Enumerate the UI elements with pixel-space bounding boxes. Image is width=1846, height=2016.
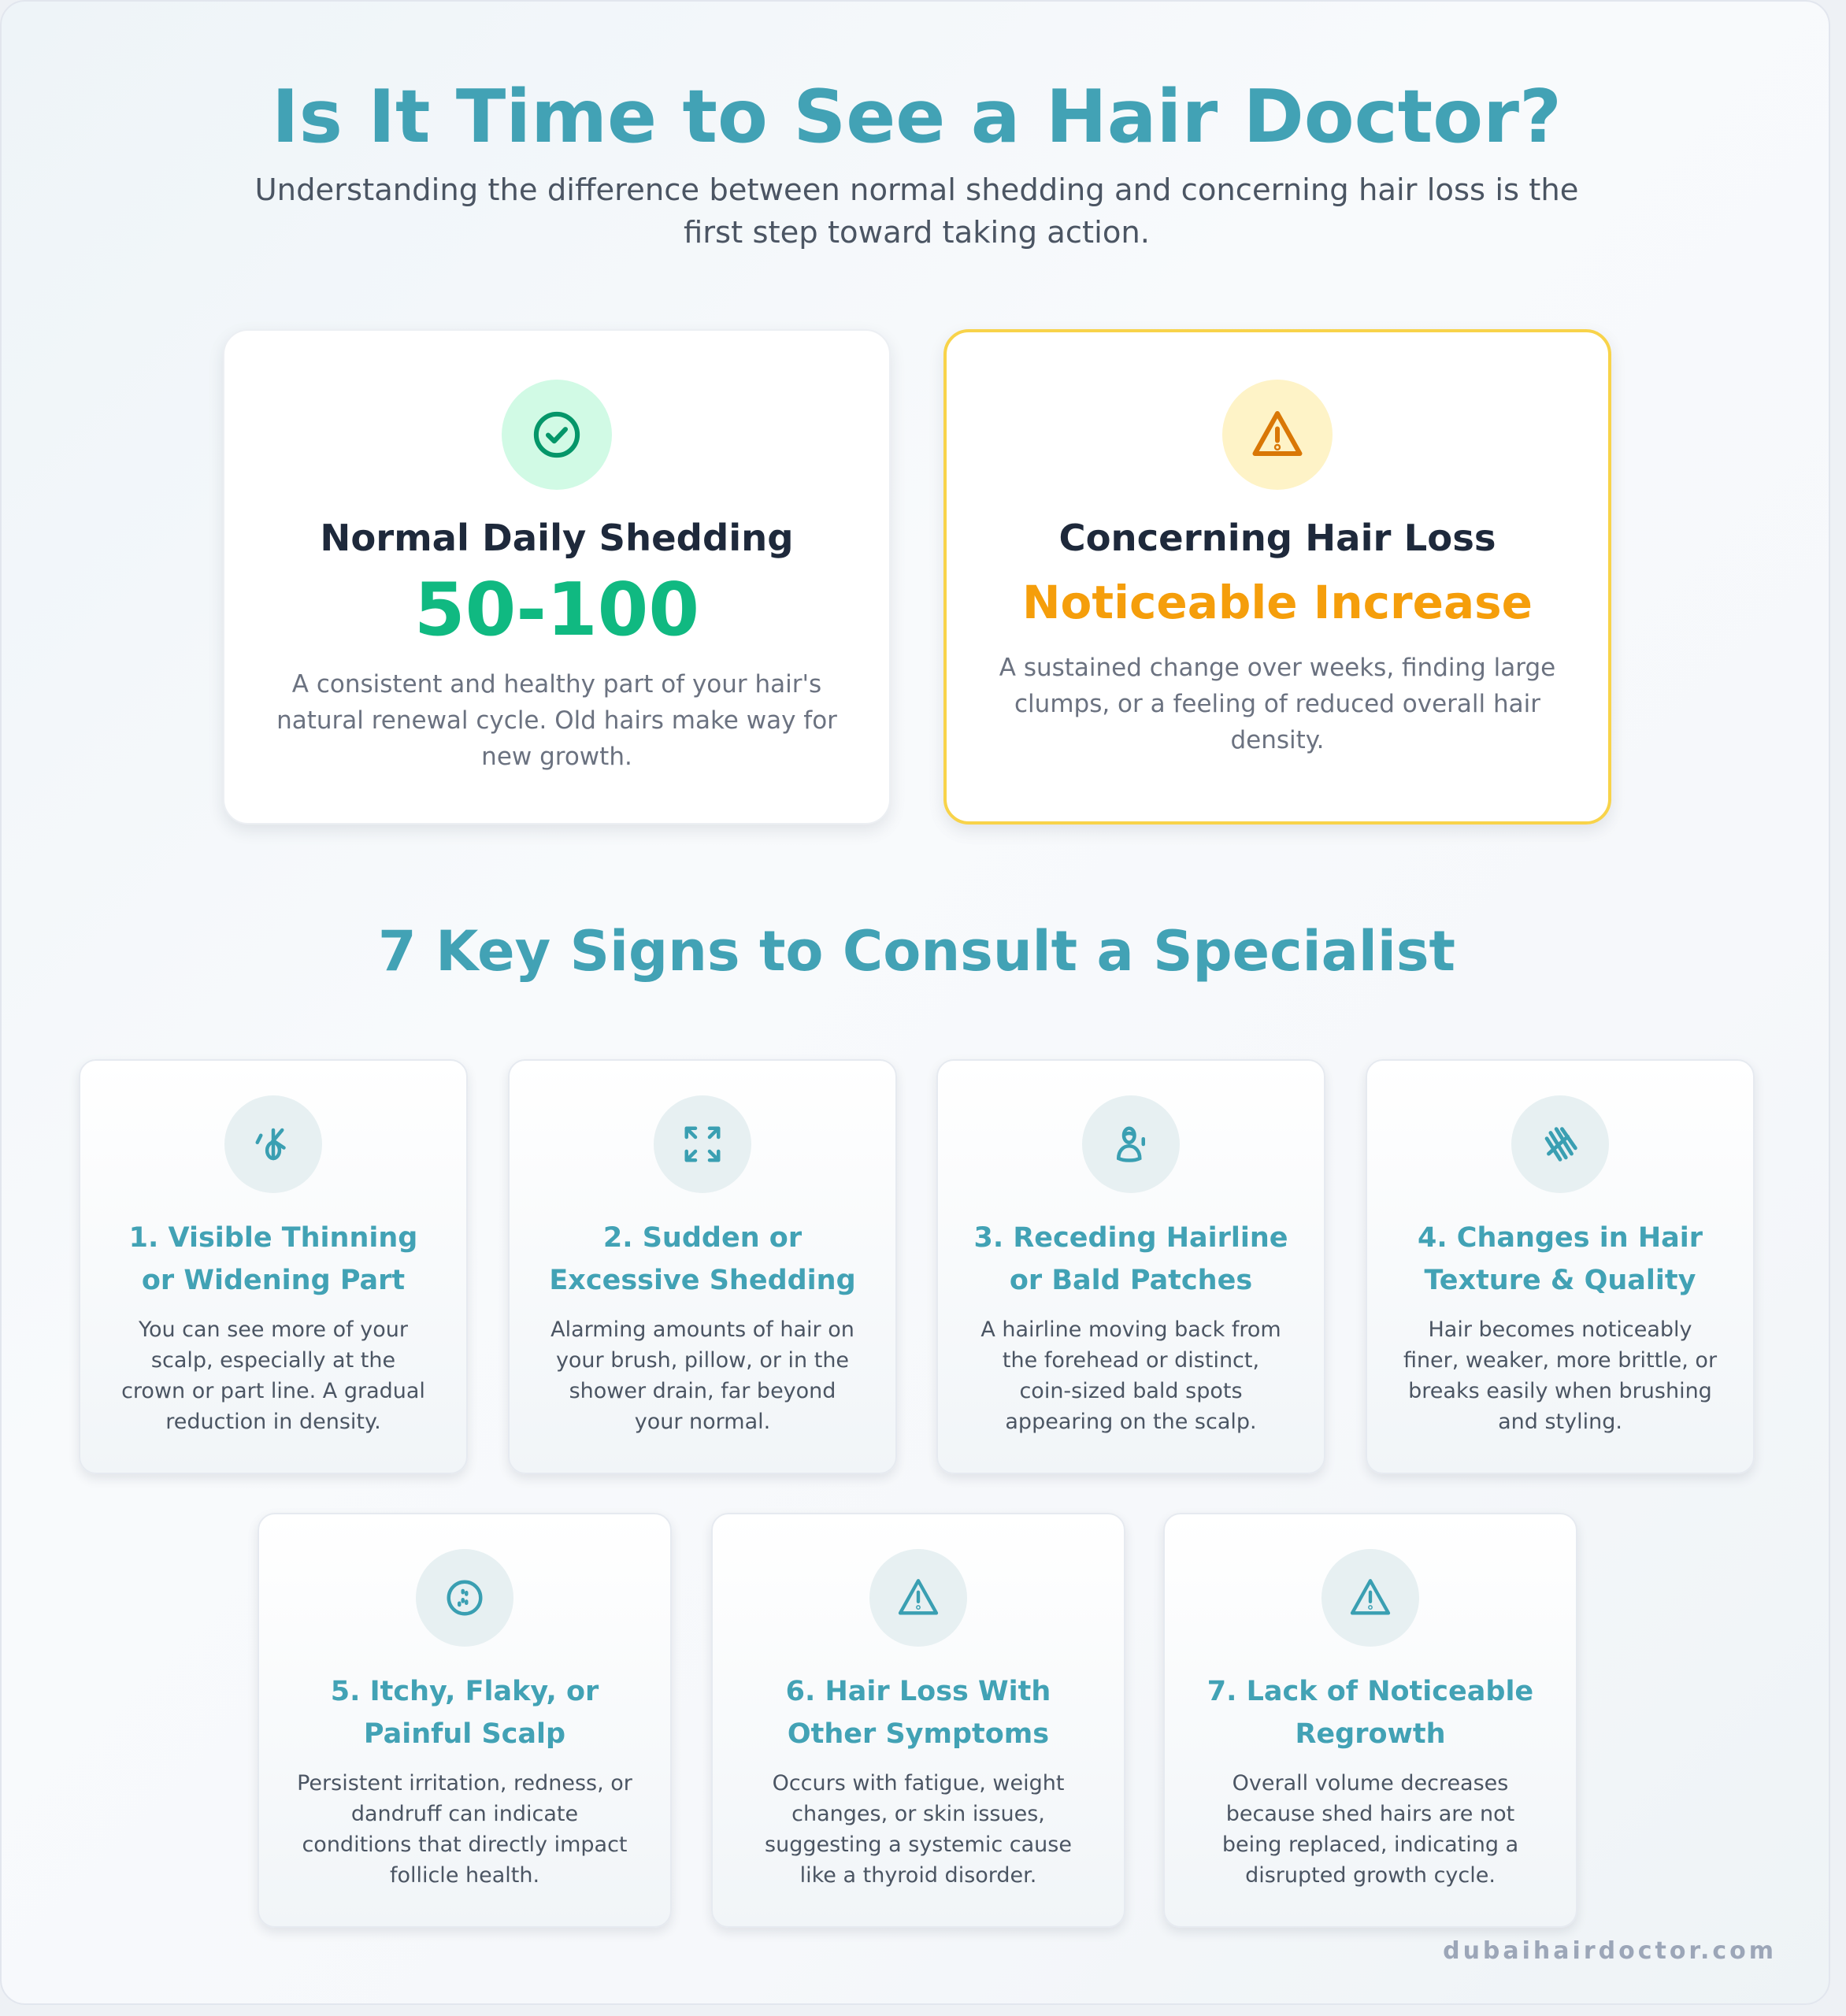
- text: A hairline moving back from the forehead or distinct, coin-sized bald spots appearing on the scalp.: [980, 1317, 1281, 1434]
- heading: 6. Hair Loss With Other Symptoms: [786, 1676, 1051, 1750]
- sign card 6: [711, 1513, 1125, 1928]
- heading: Concerning Hair Loss: [1058, 517, 1496, 559]
- heading: 4. Changes in Hair Texture & Quality: [1418, 1222, 1703, 1296]
- description: A sustained change over weeks, finding large clumps, or a feeling of reduced overall hair density.: [999, 654, 1555, 754]
- stat: Noticeable Increase: [1022, 576, 1533, 629]
- heading: Normal Daily Shedding: [320, 517, 794, 559]
- heading: 1. Visible Thinning or Widening Part: [129, 1222, 417, 1296]
- text: Occurs with fatigue, weight changes, or skin issues, suggesting a systemic cause like a thyroid disorder.: [765, 1771, 1072, 1888]
- heading: 7. Lack of Noticeable Regrowth: [1207, 1676, 1533, 1750]
- sign card 3: [936, 1059, 1325, 1474]
- title: Is It Time to See a Hair Doctor?: [272, 74, 1562, 159]
- sign card 4: [1366, 1059, 1755, 1474]
- text: Hair becomes noticeably: [1428, 1317, 1692, 1342]
- icon: hair strands: [1511, 1095, 1609, 1193]
- text: breaks easily when brushing: [1408, 1379, 1712, 1403]
- heading: 3. Receding Hairline or Bald Patches: [973, 1222, 1288, 1296]
- panel: normal shedding: [223, 329, 891, 825]
- sign card 5: [258, 1513, 672, 1928]
- text: You can see more of your scalp, especially at the crown or part line. A gradual reduction in density.: [121, 1317, 425, 1434]
- stat: 50-100: [414, 567, 699, 652]
- sign card 7: [1163, 1513, 1577, 1928]
- text: Overall volume decreases because shed hairs are not being replaced, indicating a disrupted growth cycle.: [1222, 1771, 1518, 1888]
- icon: thinning: [224, 1095, 322, 1193]
- icon: check circle: [502, 380, 612, 490]
- text: Persistent irritation, redness, or dandruff can indicate conditions that directly impact follicle health.: [297, 1771, 632, 1888]
- description: A consistent and healthy part of your hair's natural renewal cycle. Old hairs make way for new growth.: [276, 670, 837, 771]
- text: finer, weaker, more brittle, or: [1403, 1348, 1717, 1373]
- footer url: dubaihairdoctor.com: [1443, 1937, 1777, 1965]
- icon: person: [1082, 1095, 1180, 1193]
- heading: 2. Sudden or Excessive Shedding: [549, 1222, 856, 1296]
- icon: flaky scalp: [416, 1549, 513, 1647]
- icon: warning: [1321, 1549, 1419, 1647]
- sign card 2: [508, 1059, 897, 1474]
- panel: concerning loss: [943, 329, 1611, 825]
- icon: warning: [869, 1549, 967, 1647]
- section heading: 7 Key Signs to Consult a Specialist: [378, 919, 1455, 984]
- sign card 1: [79, 1059, 468, 1474]
- heading: 5. Itchy, Flaky, or Painful Scalp: [331, 1676, 599, 1750]
- text: [1403, 1317, 1717, 1434]
- text: and styling.: [1498, 1410, 1622, 1434]
- subtitle: Understanding the difference between normal shedding and concerning hair loss is the first step toward taking action.: [255, 172, 1578, 250]
- icon: expand arrows: [654, 1095, 751, 1193]
- icon: warning: [1222, 380, 1333, 490]
- text: Alarming amounts of hair on your brush, pillow, or in the shower drain, far beyond your normal.: [550, 1317, 854, 1434]
